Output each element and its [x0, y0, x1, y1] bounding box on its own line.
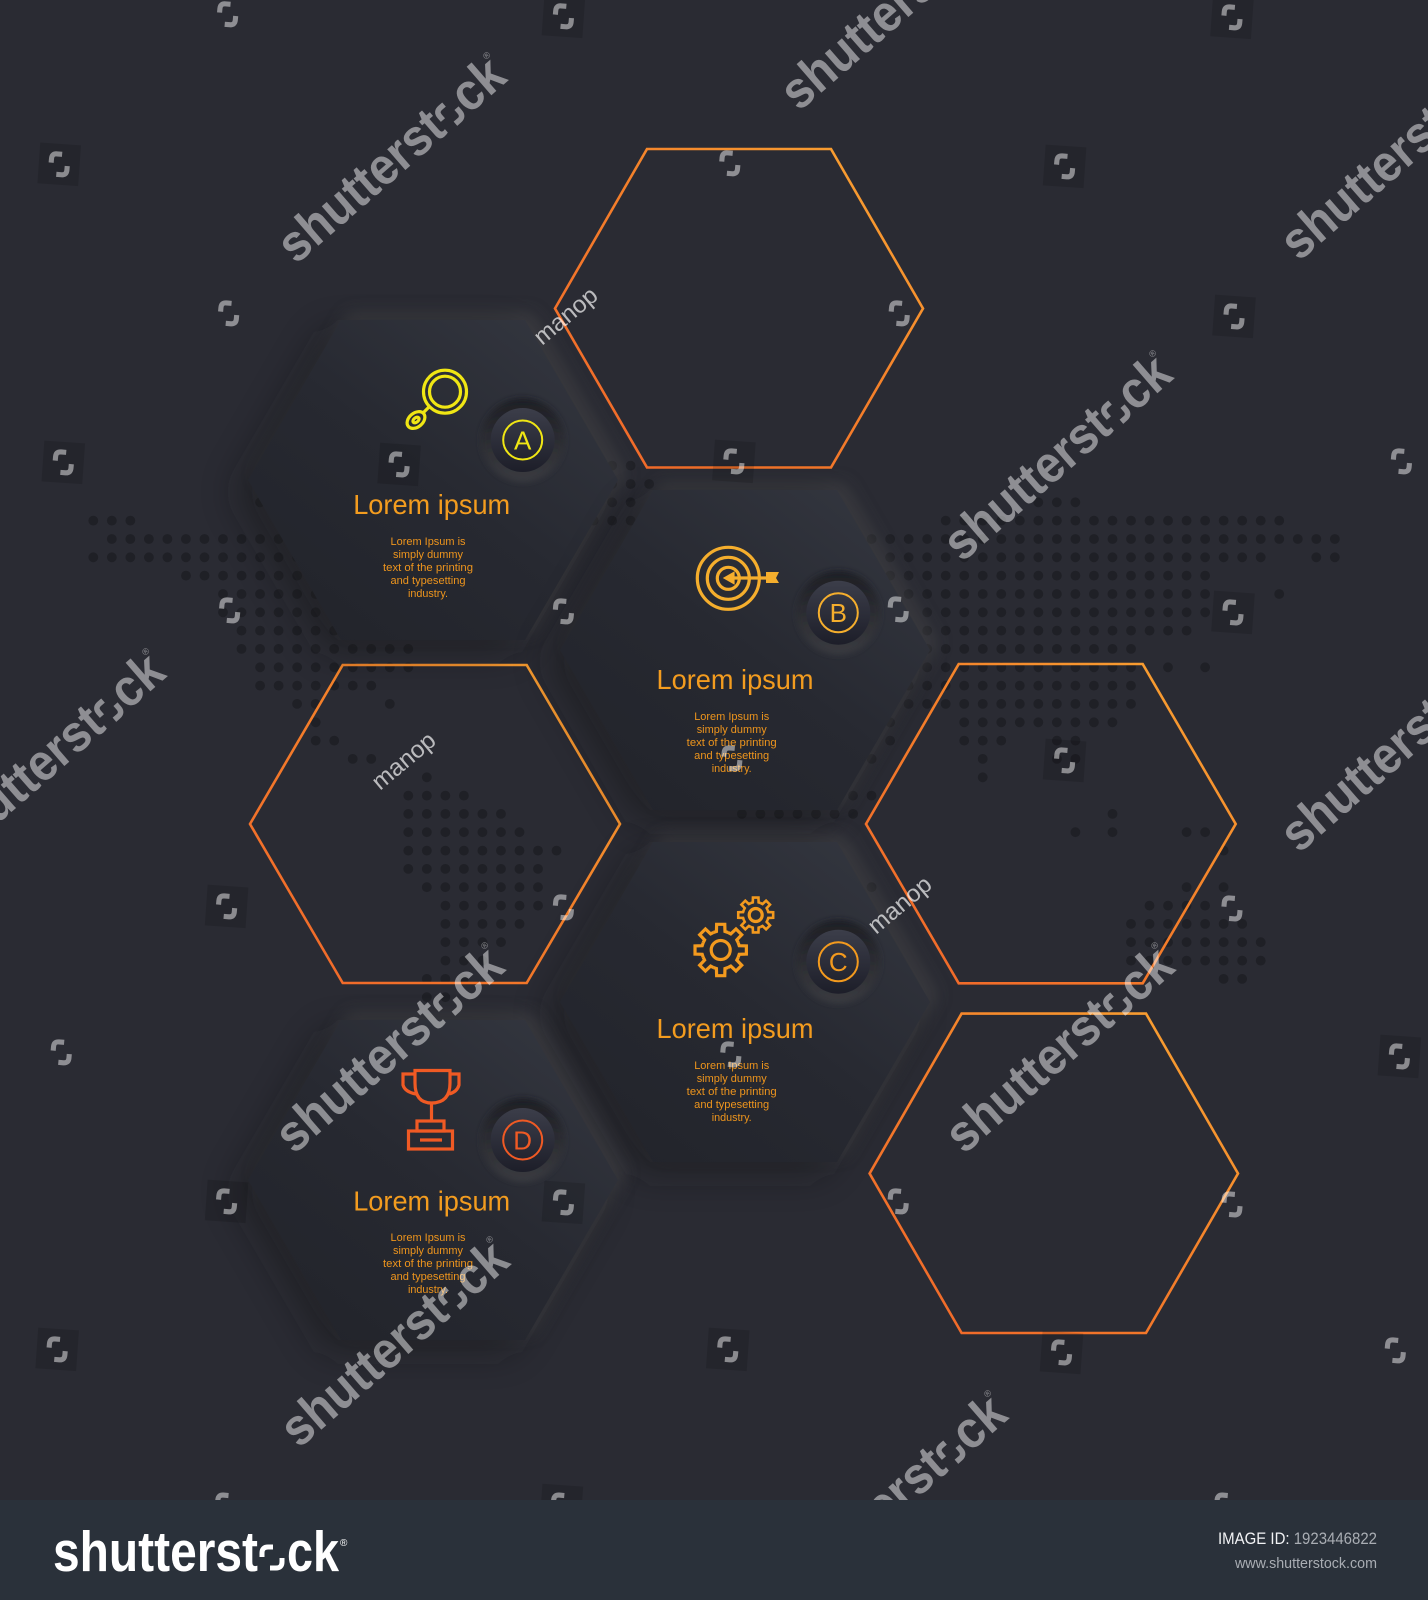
text D: text of the printing: [383, 1258, 473, 1270]
watermark: shutterstock 8: ck: [1107, 935, 1185, 1014]
footer registered mark: ®: [340, 1538, 348, 1549]
text D: industry.: [408, 1284, 448, 1296]
watermark: shutterstock 7: ck: [437, 935, 515, 1014]
watermark: shutterstock 3: [932, 341, 1185, 572]
text A: industry.: [408, 588, 448, 600]
watermark: shutterstock 10: [767, 1381, 1020, 1600]
text C: text of the printing: [687, 1086, 777, 1098]
text D: Lorem Ipsum is: [390, 1232, 466, 1244]
watermark: shutterstock 3: ck: [1105, 343, 1183, 422]
icon: target: [697, 547, 779, 609]
watermark: shutterstock 7: [264, 933, 517, 1164]
text C: simply dummy: [697, 1073, 767, 1085]
watermark: shutterstock 8: shutterst: [934, 988, 1124, 1164]
outline hexagon: middle right: [866, 664, 1236, 983]
watermark: shutterstock 9: ®: [484, 1233, 496, 1245]
watermark: shutterstock 9: [269, 1227, 522, 1458]
text A: simply dummy: [393, 549, 463, 561]
icon: gears: [695, 898, 773, 976]
title C: Lorem ipsum: [656, 1013, 814, 1044]
watermark: shutterstock 1: ®: [481, 49, 493, 61]
dotted world map: [93, 466, 1335, 997]
text B: [687, 711, 777, 775]
watermark: shutterstock 4: ck: [98, 641, 176, 720]
watermark: shutterstock 10: ®: [982, 1387, 994, 1399]
watermark: manop 2: manop: [367, 727, 441, 796]
watermark: shutterstock 3: ®: [1147, 347, 1159, 359]
outline hexagon: middle left: [250, 665, 620, 983]
outline hexagon: top: [555, 149, 923, 468]
text D: simply dummy: [393, 1245, 463, 1257]
watermark: shutterstock 7: shutterst: [264, 988, 454, 1164]
text B: Lorem Ipsum is: [694, 711, 770, 723]
footer bar: [0, 1500, 1428, 1600]
button A: A: [514, 426, 532, 456]
panel: hexagon A: [233, 313, 626, 652]
footer logo: ck: [287, 1520, 339, 1584]
footer url: www.shutterstock.com: [1234, 1555, 1377, 1572]
watermark: shutterstock 8: ®: [1149, 939, 1161, 951]
watermark: shutterstock 10: ck: [940, 1383, 1018, 1462]
watermark: manop 1: manop: [529, 282, 603, 351]
button C: [796, 920, 880, 1004]
watermark: shutterstock 9: ck: [442, 1229, 520, 1308]
button A: [481, 398, 565, 482]
watermark: shutterstock 1: shutterst: [266, 98, 456, 274]
text B: and typesetting: [694, 750, 769, 762]
button B: [796, 571, 880, 655]
watermark: shutterstock 1: ck: [439, 45, 517, 124]
text D: and typesetting: [390, 1271, 466, 1283]
footer image id: IMAGE ID: 1923446822: [1218, 1529, 1377, 1548]
watermark: shutterstock 4: [0, 639, 178, 870]
text B: simply dummy: [697, 724, 767, 736]
text A: text of the printing: [383, 562, 473, 574]
panel: hexagon D: [233, 1013, 626, 1352]
watermark: shutterstock 3: shutterst: [932, 396, 1122, 572]
text B: industry.: [712, 763, 752, 775]
watermark: shutterstock 1: [266, 43, 519, 274]
panel: hexagon B: [545, 483, 938, 822]
text D: [383, 1232, 473, 1296]
text C: industry.: [712, 1112, 752, 1124]
text B: text of the printing: [687, 737, 777, 749]
watermark: shutterstock 8: [934, 933, 1187, 1164]
text A: and typesetting: [390, 575, 466, 587]
text A: [383, 536, 473, 600]
icon: trophy: [403, 1070, 459, 1149]
title D: Lorem ipsum: [353, 1186, 510, 1217]
watermark: shutterstock 4: ®: [140, 645, 152, 657]
watermark: shutterstock 9: shutterst: [269, 1282, 459, 1458]
outline hexagon: bottom right: [870, 1014, 1238, 1333]
text C: [687, 1060, 777, 1124]
icon: magnifier: [404, 370, 466, 432]
button C: C: [829, 947, 848, 977]
text C: and typesetting: [694, 1099, 769, 1111]
button D: [481, 1098, 565, 1182]
text C: Lorem Ipsum is: [694, 1060, 770, 1072]
footer logo: shutterst: [53, 1520, 258, 1584]
button B: B: [830, 598, 847, 628]
watermark: shutterstock 7: ®: [479, 939, 491, 951]
panel: hexagon C: [545, 835, 938, 1174]
watermark: manop 3: manop: [863, 871, 937, 940]
title A: Lorem ipsum: [353, 489, 510, 520]
title B: Lorem ipsum: [656, 664, 814, 695]
text A: Lorem Ipsum is: [390, 536, 466, 548]
button D: D: [513, 1126, 532, 1156]
